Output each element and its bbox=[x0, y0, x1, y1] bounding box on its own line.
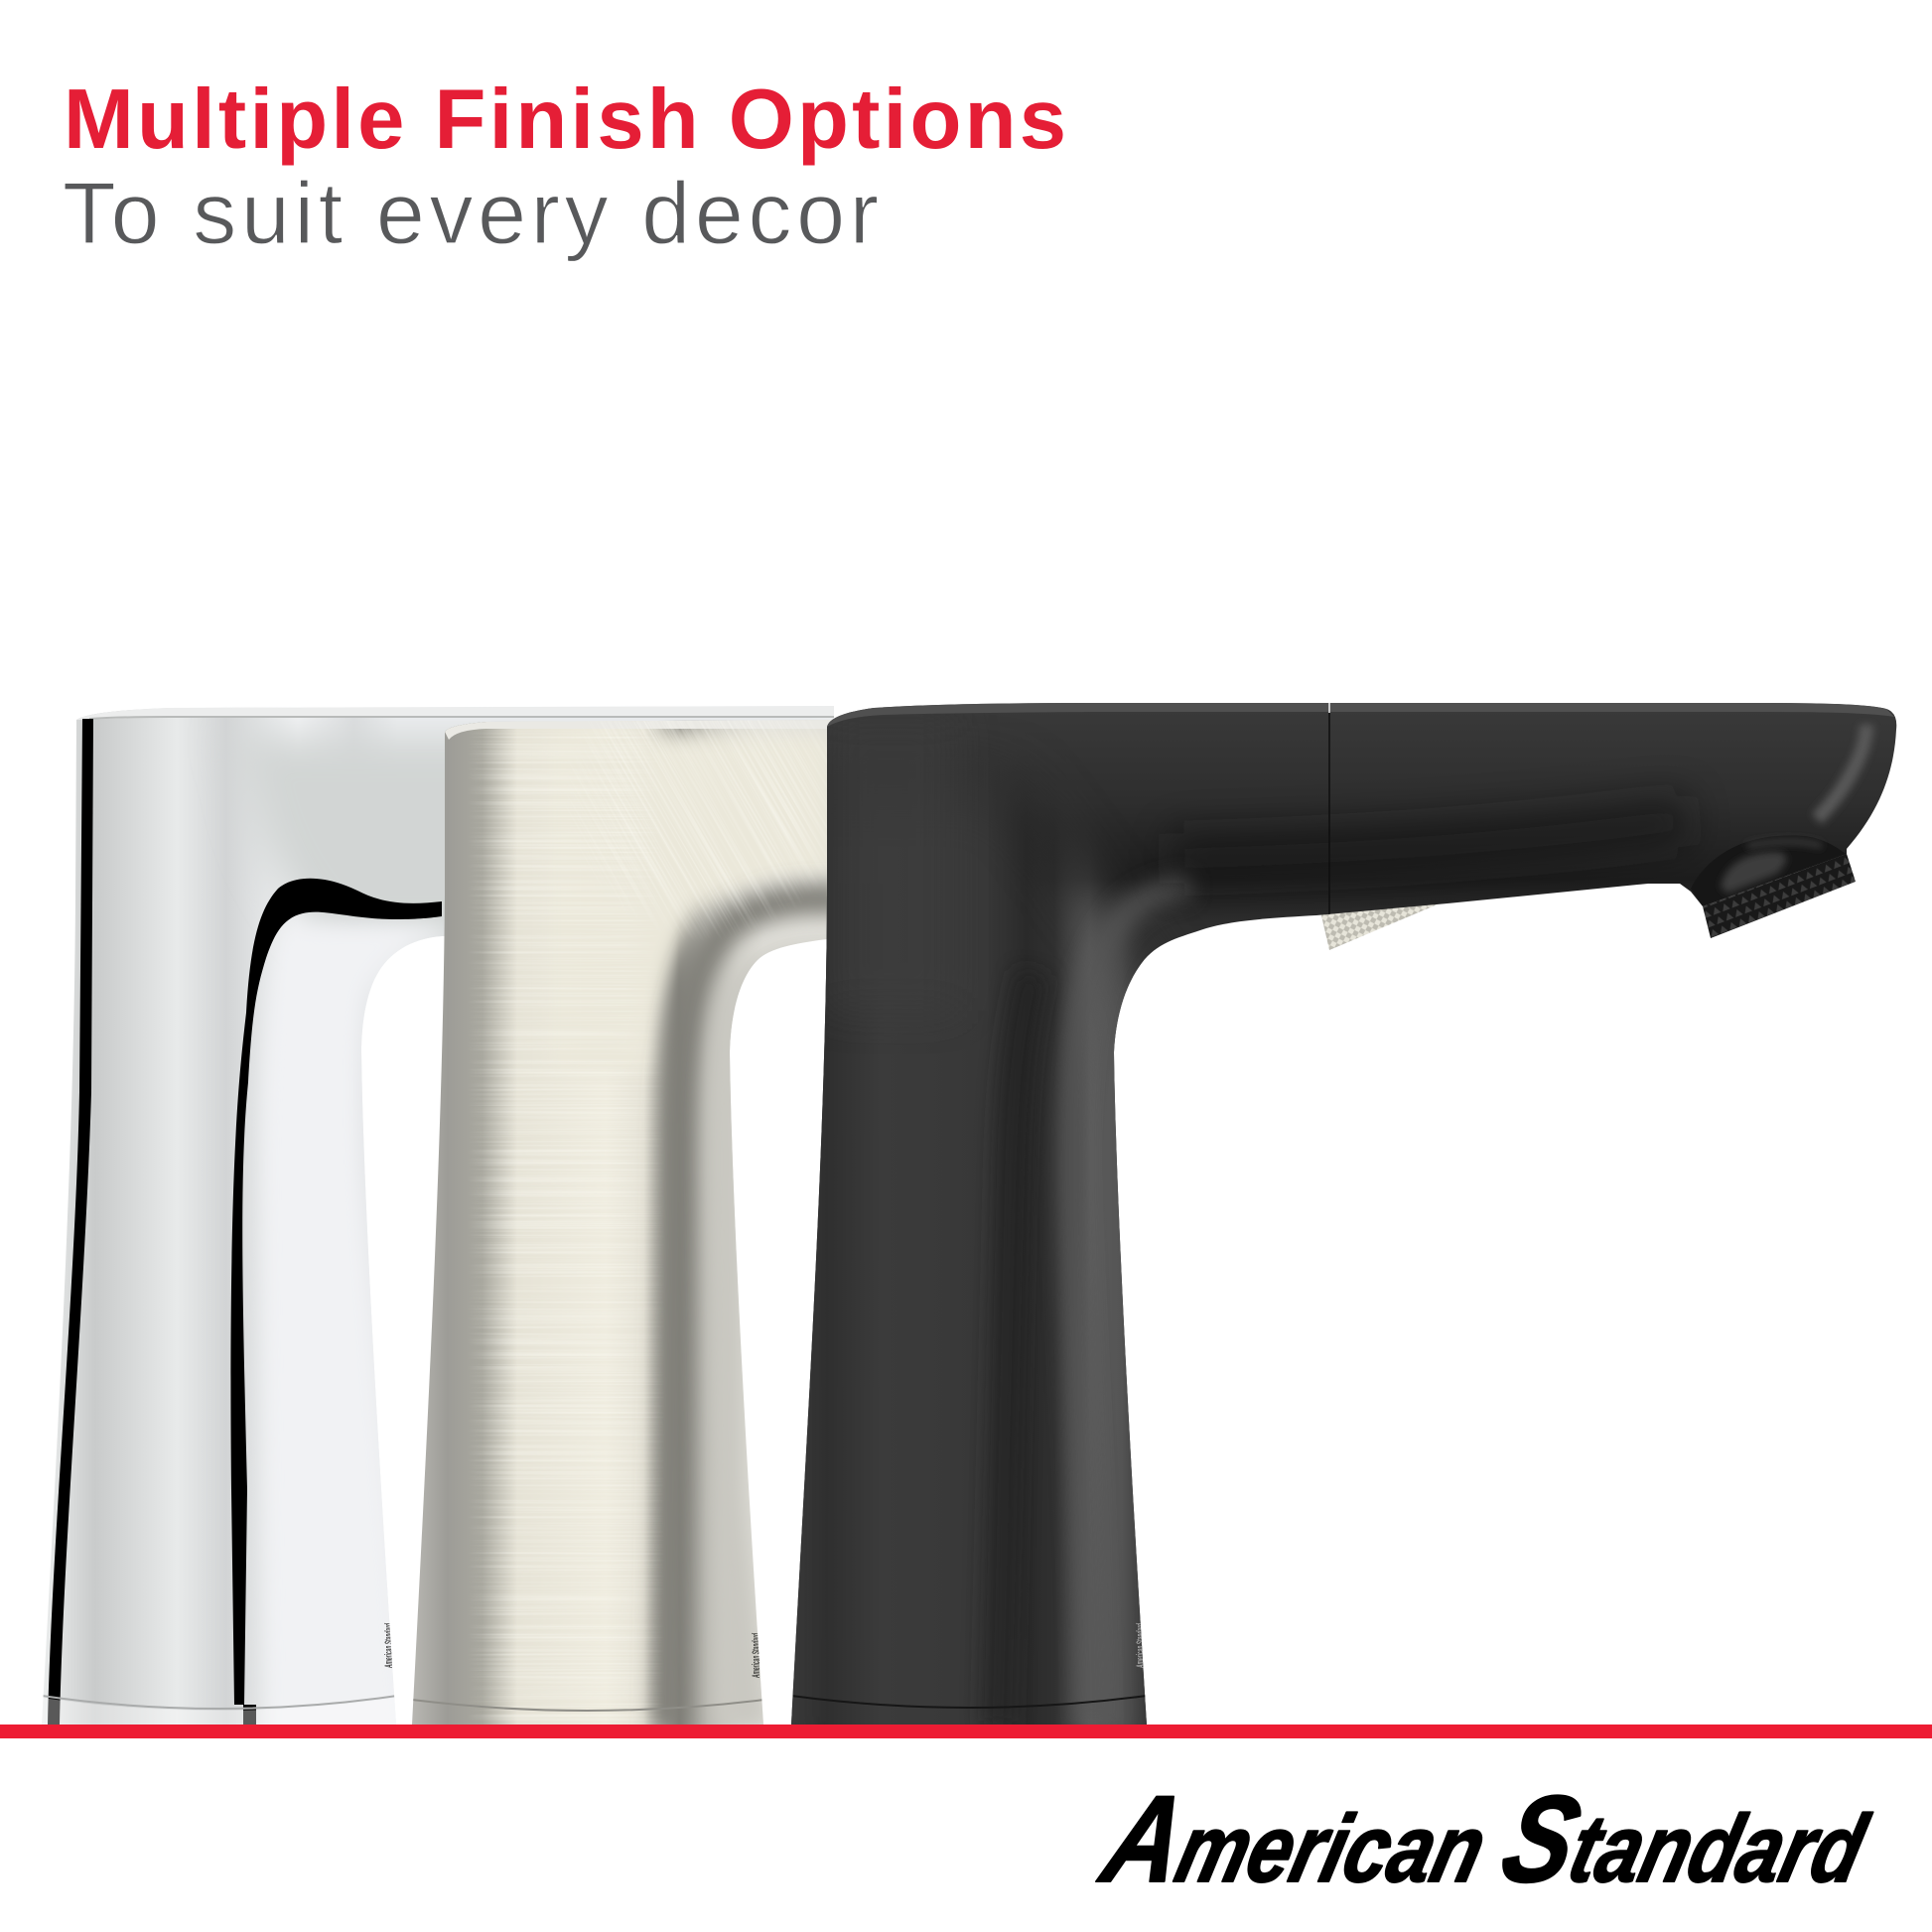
chrome base band bbox=[48, 1698, 262, 1725]
black nozzle neck highlight bbox=[1721, 852, 1786, 894]
faucet: matte black finish: American Standard bbox=[1135, 1623, 1147, 1668]
black underside shadow bbox=[1172, 819, 1688, 859]
faucet: polished chrome finish: American Standard bbox=[383, 1623, 395, 1668]
logo: American Standard wordmark: American Standard bbox=[1089, 1770, 1884, 1908]
brushed texture horizontal bbox=[477, 733, 654, 1720]
subtitle: To suit every decor: To suit every decor bbox=[63, 164, 879, 262]
brushed inner lighter leg bbox=[699, 941, 810, 1725]
black nozzle neck shadow bbox=[1691, 835, 1849, 906]
faucet: polished chrome finish bbox=[30, 695, 844, 1747]
black stem dark shadow bbox=[998, 973, 1033, 1727]
black knurled aerator bbox=[1703, 854, 1856, 938]
black top cap highlight bbox=[827, 703, 1894, 727]
black seam top highlight bbox=[1328, 703, 1330, 713]
red baseline bar bbox=[0, 1725, 1932, 1738]
chrome left reflection stripe bbox=[48, 719, 93, 1725]
brushed base seam bbox=[412, 1700, 764, 1711]
title: Multiple Finish Options: Multiple Finish Options bbox=[64, 72, 1066, 167]
chrome top cap highlight bbox=[77, 707, 382, 720]
chrome curved reflection stripe bbox=[230, 879, 442, 1725]
black curved light band bbox=[1051, 870, 1196, 1451]
faucet: matte black finish bbox=[774, 695, 1906, 1727]
chrome spout shading bbox=[250, 721, 465, 939]
black stem gradient bbox=[791, 807, 1159, 1725]
brushed top cap bbox=[445, 720, 834, 740]
black spout seam bbox=[1328, 711, 1330, 917]
chrome base seam bbox=[42, 1696, 397, 1709]
black base band seam bbox=[791, 1696, 1147, 1708]
black spout end highlight bbox=[1817, 725, 1866, 819]
brushed texture diagonal bbox=[608, 729, 806, 930]
chrome cap shadow line bbox=[89, 717, 834, 719]
brushed spout cream area bbox=[645, 729, 827, 1060]
brushed curved shadow band bbox=[667, 898, 844, 1727]
faucet: brushed nickel finish bbox=[412, 720, 832, 1725]
faucet: brushed nickel finish: American Standard bbox=[751, 1633, 762, 1678]
black upper body tone bbox=[831, 705, 915, 721]
knurled nickel aerator behind black spout bbox=[1320, 894, 1451, 950]
chrome inner white area bbox=[263, 923, 442, 1747]
black nozzle arch highlight bbox=[1747, 842, 1822, 846]
